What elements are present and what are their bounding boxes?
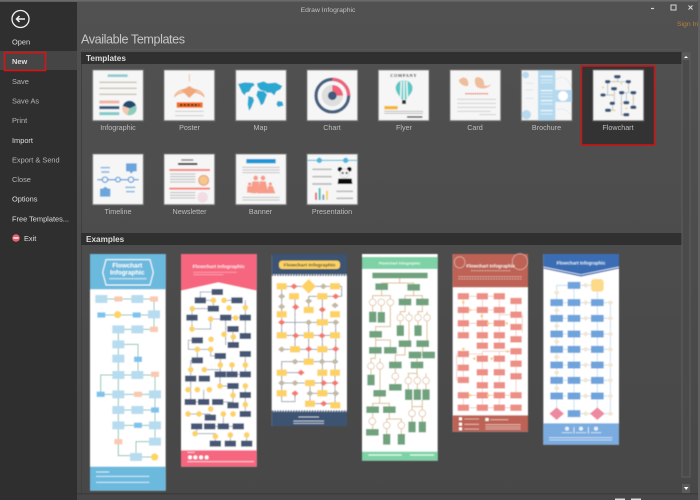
template: presentation — [307, 154, 358, 216]
template: flowchart — [593, 70, 644, 132]
sign in link: Sign In — [677, 21, 698, 28]
section bar: templates — [81, 52, 682, 64]
template: brochure — [521, 70, 572, 132]
template: map — [236, 70, 286, 132]
template: infographic: Infographic — [100, 123, 136, 132]
menu items: Save As — [12, 96, 39, 106]
template: newsletter — [164, 154, 215, 216]
section bar: examples — [81, 233, 682, 245]
example: pink flowchart — [181, 254, 257, 467]
template: infographic — [93, 70, 143, 132]
template: poster — [164, 70, 215, 132]
example: blue flowchart — [90, 254, 166, 491]
ribbon — [372, 273, 428, 278]
template: brochure: Brochure — [532, 123, 561, 132]
template: newsletter: Newsletter — [173, 207, 207, 216]
menu items: Import — [12, 136, 33, 145]
example: blue process flowchart — [543, 254, 619, 445]
title pill: Flowchart Infographic — [284, 263, 336, 269]
menu items: Print — [12, 116, 27, 125]
icon: exit — [12, 234, 20, 242]
template: timeline: Timeline — [105, 207, 131, 216]
title badge — [103, 260, 153, 285]
menu items: Export & Send — [12, 156, 60, 164]
menu items: Options — [12, 194, 38, 204]
template: chart: Chart — [323, 123, 341, 132]
menu items — [12, 38, 69, 243]
example: navy and yellow flowchart — [272, 254, 347, 426]
template: banner: Banner — [249, 207, 273, 216]
template: chart — [307, 70, 358, 132]
example: salmon flowchart — [453, 254, 528, 432]
title badge: Flowchart — [112, 262, 143, 269]
title: Flowchart Infographic — [193, 264, 245, 270]
menu items: Save — [12, 77, 29, 86]
template: flyer: Flyer — [396, 123, 413, 132]
template: poster: Poster — [179, 123, 200, 132]
title pill — [279, 261, 340, 269]
menu items: New — [12, 57, 27, 66]
template: flyer — [378, 70, 429, 132]
scroll up button — [682, 53, 690, 60]
scroll down button — [682, 484, 690, 493]
menu items: Close — [12, 175, 31, 184]
selected template highlight — [582, 66, 654, 145]
title badge: Infographic — [110, 269, 145, 276]
menu items: Open — [12, 38, 30, 46]
window controls — [651, 5, 692, 10]
section bar: templates: Templates — [86, 54, 126, 63]
template: flowchart: Flowchart — [602, 123, 634, 132]
template: flyer: COMPANY — [390, 73, 417, 78]
page heading: Available Templates — [81, 32, 185, 46]
highlight box: New — [4, 52, 46, 70]
template: card — [450, 70, 501, 132]
title: Flowchart Infographic — [466, 263, 515, 268]
window title: Edraw Infographic — [301, 7, 356, 14]
template: banner — [236, 154, 286, 216]
section bar: examples: Examples — [86, 235, 125, 244]
title: Flowchart Infographic — [379, 260, 421, 265]
scrollbar — [682, 53, 690, 493]
menu items: Free Templates... — [12, 214, 69, 224]
sidebar menu — [0, 2, 77, 500]
template: presentation: Presentation — [312, 207, 352, 216]
back arrow button — [12, 10, 29, 28]
title: Flowchart Infographic — [557, 261, 606, 266]
status bar — [77, 493, 698, 500]
template: card: Card — [467, 123, 483, 132]
selected row: New — [0, 51, 77, 70]
template: timeline — [93, 154, 143, 216]
menu items: Exit — [24, 234, 36, 243]
template: map: Map — [254, 123, 267, 132]
example: green flowchart — [362, 254, 438, 461]
